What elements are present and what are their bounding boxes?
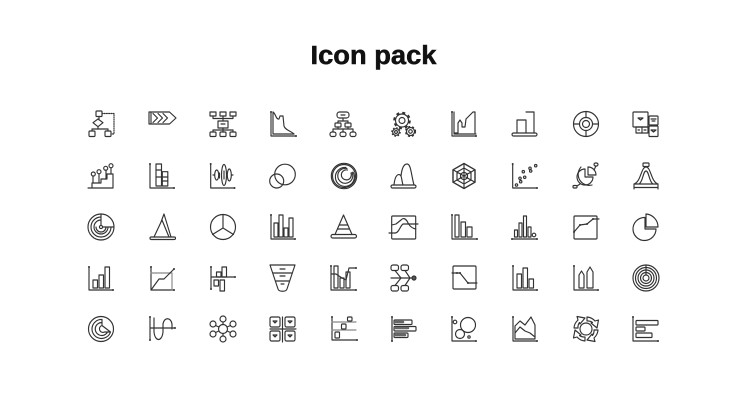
icon: rising line in frame [573,216,599,239]
icon: stacked bars [149,163,175,189]
icon: layered area chart [512,316,538,342]
icon: pie with sector [633,214,658,240]
icon: horizontal progress bars [391,316,416,342]
icon: arrow bars [573,265,599,291]
icon: three-part pie [210,214,236,240]
icon: bell hump [391,164,416,188]
icon: scatter plot [512,163,538,189]
icon: overlapping circles [270,164,295,188]
icon: radar web [453,164,475,188]
icon: step scatter [331,316,358,341]
icon: line chart with box [150,266,175,291]
icon: area chart with drop [270,111,297,137]
icon: stairs with lollipops [88,164,113,188]
icon: nested circles [331,163,357,189]
icon: circular arrows [574,316,598,342]
icon: triangles on base [150,214,176,240]
icon: ring segments [88,316,114,342]
icon: hub network [210,316,236,342]
icon: bell curve with range [634,163,658,189]
icon: target donut [574,112,598,136]
icon: violin plot [210,163,236,189]
icon: horizontal bars [632,316,659,342]
icon: fishbone diagram [391,265,416,291]
icon: flowchart [89,111,114,136]
icon: bubble chart [451,316,477,342]
icon: network hierarchy [210,112,236,136]
icon: three rising bars [88,266,114,291]
icon: funnel [270,265,295,291]
icon: area chart with arrow [451,111,477,137]
icon: dashboard boxes [633,112,658,136]
icon: line chart in frame [389,216,418,239]
icon: descending bars [451,214,478,240]
icon: concentric radial [633,265,659,291]
icon: four quadrants [270,317,296,342]
icon: chevron process [149,112,176,124]
icon: layered cone [331,215,356,238]
icon: histogram [511,216,538,240]
icon: gears [392,113,415,136]
icon: diverging bars [210,266,236,291]
title: Icon pack [310,42,437,70]
icon grid [88,111,659,342]
icon: grouped bars [512,265,538,291]
icon: bars with line [330,265,357,291]
icon: radial pie chart [88,214,114,240]
icon: tall bars [270,214,296,240]
icon: falling step in frame [452,266,477,289]
icon: exploded pie [573,163,598,188]
icon: org tree [330,112,356,136]
icon: bars on base [512,112,537,136]
icon: sine wave [149,316,176,341]
